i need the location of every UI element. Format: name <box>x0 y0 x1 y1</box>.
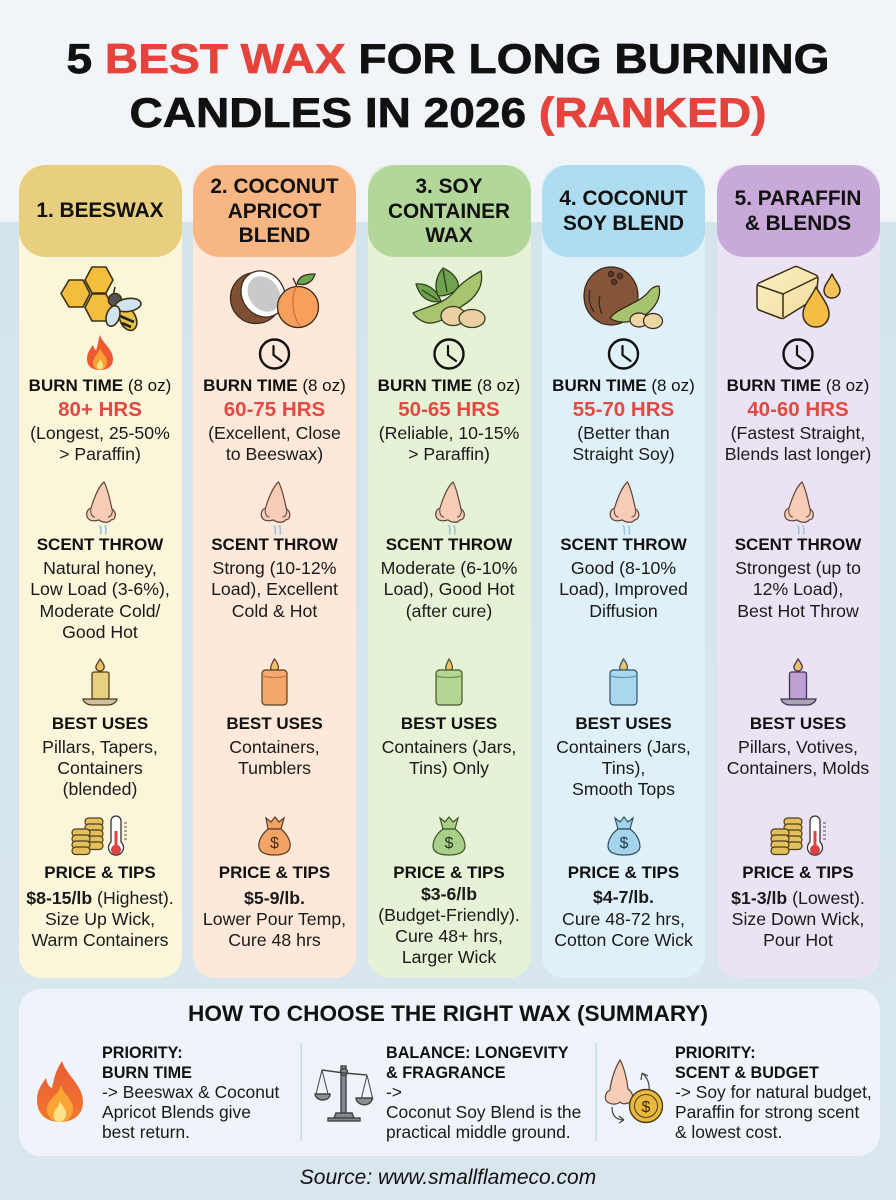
summary: balance <box>386 1044 581 1142</box>
summary: balance: BALANCE: LONGEVITY <box>386 1044 569 1062</box>
price and tips: PRICE & TIPS <box>219 863 330 882</box>
price and tips: (Budget-Friendly). <box>378 905 520 925</box>
summary: scent and budget: -> Soy for natural budget, <box>675 1082 872 1102</box>
header: Soy Container Wax <box>368 165 531 257</box>
best uses: Pillars, Votives, <box>738 737 858 757</box>
scent throw: Diffusion <box>589 601 658 621</box>
price and tips <box>378 863 520 967</box>
scent throw: SCENT THROW <box>386 535 513 554</box>
icon: coins and thermometer <box>771 816 826 855</box>
best uses <box>226 714 323 778</box>
burn time: (Better than <box>577 423 670 443</box>
scent throw: Moderate (6-10% <box>381 558 518 578</box>
burn time: BURN TIME (8 oz) <box>552 376 695 395</box>
scent throw: Good Hot <box>62 622 138 642</box>
icon: pillar candle <box>83 659 117 705</box>
scent throw: (after cure) <box>406 601 492 621</box>
scent throw: Load), Improved <box>559 579 688 599</box>
scent throw: SCENT THROW <box>211 535 339 554</box>
icon: nose <box>87 482 115 534</box>
best uses: BEST USES <box>52 714 148 733</box>
header: Paraffin & Blends <box>717 165 880 257</box>
burn time: > Paraffin) <box>408 444 490 464</box>
burn time: (Fastest Straight, <box>731 423 865 443</box>
scent throw: Good (8-10% <box>571 558 676 578</box>
scent throw <box>30 535 170 642</box>
divider <box>300 1043 302 1141</box>
burn time: 60-75 HRS <box>224 398 325 421</box>
best uses <box>727 714 869 778</box>
summary: burn time: best return. <box>102 1122 190 1142</box>
summary: scent and budget: Paraffin for strong scent <box>675 1102 859 1122</box>
icon: wax block and oil drops <box>757 266 840 327</box>
price and tips <box>203 863 346 950</box>
price and tips: $5-9/lb. <box>244 888 305 908</box>
scent throw: Load), Excellent <box>211 579 338 599</box>
icon: nose and coin: $ <box>642 1099 651 1116</box>
header: Soy Container Wax: CONTAINER <box>388 200 510 223</box>
price and tips: PRICE & TIPS <box>742 863 854 882</box>
header: Beeswax <box>19 165 182 257</box>
header: Beeswax: 1. BEESWAX <box>36 199 164 222</box>
price and tips: PRICE & TIPS <box>568 863 679 882</box>
burn time: 80+ HRS <box>58 398 142 421</box>
price and tips: Lower Pour Temp, <box>203 909 346 929</box>
best uses: Tins), <box>602 758 645 778</box>
icon: coins and thermometer <box>72 816 127 855</box>
price and tips: Pour Hot <box>763 930 833 950</box>
icon: clock <box>609 340 638 368</box>
best uses: BEST USES <box>226 714 323 733</box>
icon: clock <box>260 340 289 368</box>
icon: container candle <box>436 659 462 705</box>
icon: clock <box>434 340 464 368</box>
burn time <box>552 376 695 464</box>
scent throw: SCENT THROW <box>560 535 688 554</box>
icon: clock <box>784 340 812 368</box>
burn time: (Excellent, Close <box>208 423 341 443</box>
icon: money bag <box>608 817 640 855</box>
summary: balance: & FRAGRANCE <box>386 1064 506 1082</box>
burn time <box>378 376 520 464</box>
icon: nose <box>436 482 464 534</box>
burn time: BURN TIME (8 oz) <box>727 376 869 395</box>
scent throw: Low Load (3-6%), <box>30 579 170 599</box>
panel: 3. Soy Container Wax <box>368 165 531 978</box>
burn time <box>725 376 871 464</box>
scent throw: Best Hot Throw <box>737 601 859 621</box>
header: Paraffin & Blends: & BLENDS <box>745 212 851 235</box>
icon: nose <box>785 482 813 534</box>
scent throw <box>381 535 518 621</box>
price and tips: Cotton Core Wick <box>554 930 693 950</box>
best uses <box>556 714 691 799</box>
summary: scent and budget: & lowest cost. <box>675 1122 782 1142</box>
price and tips: Cure 48+ hrs, <box>395 926 503 946</box>
burn time: 40-60 HRS <box>747 398 849 421</box>
burn time: 55-70 HRS <box>573 398 674 421</box>
icon: money bag: $ <box>270 835 279 852</box>
icon: pillar candle <box>781 659 816 705</box>
price and tips: $1-3/lb (Lowest). <box>731 888 865 908</box>
price and tips: PRICE & TIPS <box>393 863 505 882</box>
header: Coconut Apricot Blend: 2. COCONUT <box>210 175 339 198</box>
summary: burn time: PRIORITY: <box>102 1044 183 1062</box>
burn time: Straight Soy) <box>572 444 675 464</box>
icon: honeycomb and bee <box>61 267 142 333</box>
icon: nose <box>610 482 639 534</box>
price and tips: $8-15/lb (Highest). <box>26 888 174 908</box>
scent throw <box>559 535 688 621</box>
header: Coconut Soy Blend <box>542 165 705 257</box>
best uses: Tins) Only <box>409 758 489 778</box>
burn time <box>29 376 171 464</box>
burn time <box>203 376 346 464</box>
summary heading: HOW TO CHOOSE THE RIGHT WAX (SUMMARY) <box>188 1001 708 1026</box>
icon: money bag <box>259 817 290 855</box>
scent throw: 12% Load), <box>753 579 843 599</box>
scent throw: Moderate Cold/ <box>40 601 161 621</box>
panel: 2. Coconut Apricot Blend <box>193 165 356 978</box>
icon: money bag <box>433 817 465 855</box>
icon: flame <box>87 335 113 370</box>
summary: scent and budget: PRIORITY: <box>675 1044 756 1062</box>
header: Coconut Soy Blend: SOY BLEND <box>563 212 684 235</box>
burn time: BURN TIME (8 oz) <box>29 376 171 395</box>
icon: nose <box>261 482 290 534</box>
panel: 4. Coconut Soy Blend <box>542 165 705 978</box>
scent throw <box>211 535 339 621</box>
panel: 5. Paraffin & Blends <box>717 165 880 978</box>
scent throw: Load), Good Hot <box>384 579 514 599</box>
title <box>66 35 829 136</box>
summary: balance: -> <box>386 1082 402 1102</box>
best uses: BEST USES <box>575 714 672 733</box>
scent throw: SCENT THROW <box>735 535 862 554</box>
header: Soy Container Wax: 3. SOY <box>415 175 483 198</box>
best uses: Containers, <box>229 737 320 757</box>
burn time: BURN TIME (8 oz) <box>203 376 346 395</box>
price and tips: Cure 48 hrs <box>228 930 321 950</box>
price and tips: $3-6/lb <box>421 884 477 904</box>
best uses: Containers <box>57 758 143 778</box>
header: Paraffin & Blends: 5. PARAFFIN <box>735 187 861 210</box>
summary: burn time: BURN TIME <box>102 1064 192 1082</box>
burn time: 50-65 HRS <box>398 398 500 421</box>
scent throw: Cold & Hot <box>232 601 317 621</box>
icon: balance scale <box>315 1066 373 1121</box>
best uses <box>382 714 516 778</box>
summary: burn time <box>102 1044 280 1142</box>
price and tips <box>26 863 174 950</box>
summary: burn time: -> Beeswax & Coconut <box>102 1082 280 1102</box>
summary: balance: Coconut Soy Blend is the <box>386 1102 581 1122</box>
burn time: Blends last longer) <box>725 444 871 464</box>
icon: container candle <box>262 659 287 705</box>
icon: money bag: $ <box>620 835 629 852</box>
summary: scent and budget <box>675 1044 872 1142</box>
best uses: BEST USES <box>750 714 846 733</box>
scent throw <box>735 535 862 621</box>
best uses: Containers (Jars, <box>556 737 691 757</box>
best uses: (blended) <box>63 779 137 799</box>
title: 5 BEST WAX FOR LONG BURNING <box>66 35 829 82</box>
burn time: > Paraffin) <box>59 444 141 464</box>
source line: Source: www.smallflameco.com <box>300 1166 596 1189</box>
summary: balance: practical middle ground. <box>386 1122 571 1142</box>
header: Coconut Apricot Blend: APRICOT <box>228 200 322 223</box>
price and tips <box>731 863 865 950</box>
icon: soybeans and leaves <box>413 268 485 328</box>
price and tips: Larger Wick <box>402 947 496 967</box>
scent throw: Strongest (up to <box>735 558 861 578</box>
best uses: BEST USES <box>401 714 497 733</box>
icon: coconut and apricot <box>230 262 318 328</box>
burn time: to Beeswax) <box>226 444 323 464</box>
price and tips <box>554 863 693 950</box>
icon: container candle <box>610 659 637 705</box>
header: Coconut Apricot Blend <box>193 165 356 257</box>
burn time: (Longest, 25-50% <box>30 423 170 443</box>
title: CANDLES IN 2026 (RANKED) <box>130 89 766 136</box>
best uses: Containers, Molds <box>727 758 869 778</box>
price and tips: PRICE & TIPS <box>44 863 156 882</box>
price and tips: Size Up Wick, <box>45 909 155 929</box>
burn time: (Reliable, 10-15% <box>379 423 520 443</box>
panel: summary <box>19 989 880 1156</box>
price and tips: Warm Containers <box>32 930 169 950</box>
best uses: Tumblers <box>238 758 311 778</box>
header: Soy Container Wax: WAX <box>425 224 473 247</box>
burn time: BURN TIME (8 oz) <box>378 376 520 395</box>
price and tips: Cure 48-72 hrs, <box>562 909 685 929</box>
icon: coconut and soybeans <box>584 267 662 328</box>
price and tips: $4-7/lb. <box>593 887 654 907</box>
best uses: Pillars, Tapers, <box>42 737 158 757</box>
divider <box>596 1043 597 1141</box>
best uses: Containers (Jars, <box>382 737 516 757</box>
scent throw: Natural honey, <box>43 558 157 578</box>
best uses: Smooth Tops <box>572 779 675 799</box>
icon: large flame <box>37 1061 83 1122</box>
best uses <box>42 714 158 799</box>
scent throw: Strong (10-12% <box>213 558 337 578</box>
icon: money bag: $ <box>445 835 454 852</box>
panel: 1. Beeswax <box>19 165 182 978</box>
header: Coconut Soy Blend: 4. COCONUT <box>559 187 688 210</box>
summary: scent and budget: SCENT & BUDGET <box>675 1064 819 1082</box>
header: Coconut Apricot Blend: BLEND <box>239 224 310 247</box>
price and tips: Size Down Wick, <box>732 909 864 929</box>
scent throw: SCENT THROW <box>37 535 164 554</box>
summary: burn time: Apricot Blends give <box>102 1102 251 1122</box>
icon: nose and coin <box>605 1060 662 1123</box>
